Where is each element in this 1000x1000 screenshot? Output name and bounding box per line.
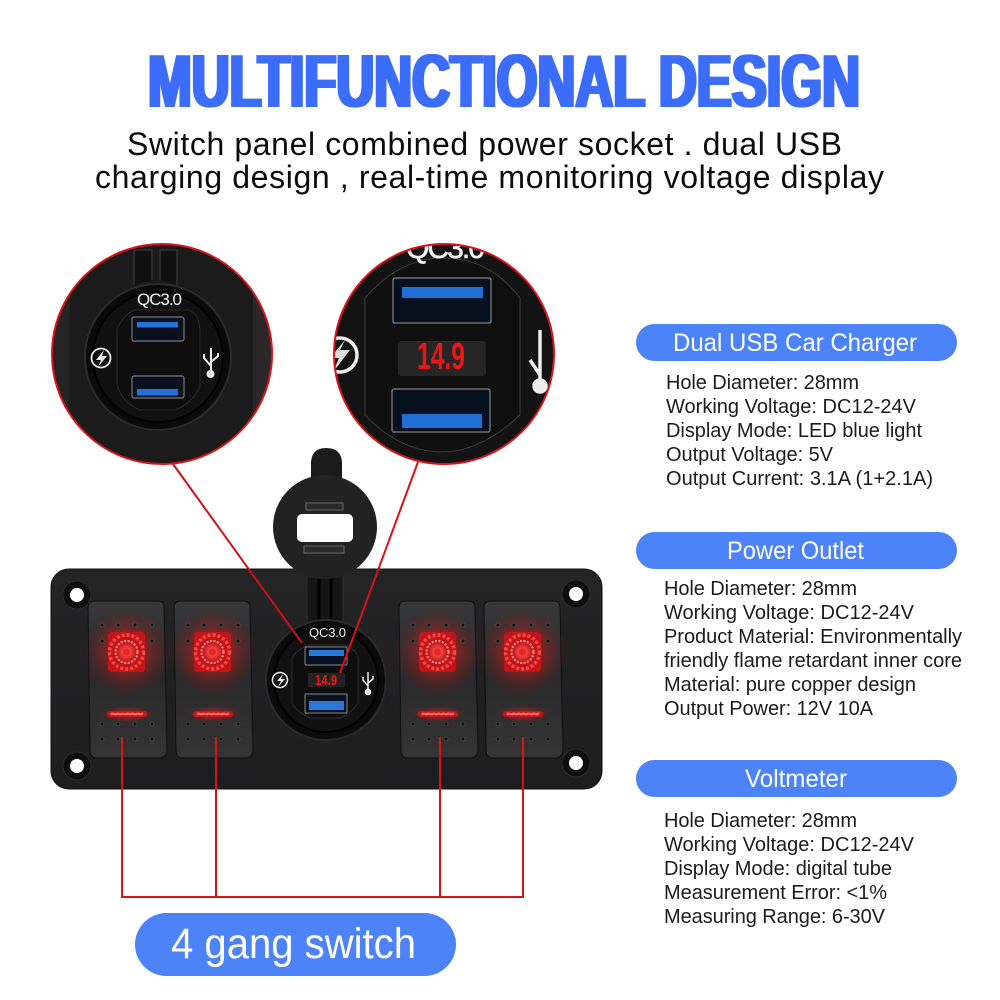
- socket cap: [273, 475, 377, 579]
- specs: Power Outlet: Material: pure copper design: [664, 674, 916, 696]
- specs: Power Outlet: Product Material: Environmentally: [664, 626, 962, 648]
- icon: fast charge bolt: [92, 348, 110, 368]
- right circle voltage display: 14.9: [417, 336, 465, 378]
- specs: Dual USB Car Charger: Display Mode: LED blue light: [666, 420, 922, 442]
- rocker switch 2: [169, 601, 257, 758]
- left circle border: [52, 244, 272, 464]
- specs: Power Outlet: [664, 578, 962, 720]
- heading pill: Voltmeter: Voltmeter: [745, 765, 847, 793]
- mounting plate: [51, 569, 602, 789]
- rocker switch 1: [83, 601, 171, 758]
- panel: left zoom circle showing USB socket: [50, 242, 275, 466]
- socket upper USB port: [305, 647, 347, 665]
- right circle label QC3.0: QC3.0: [406, 232, 485, 265]
- specs: Dual USB Car Charger: Output Voltage: 5V: [666, 444, 834, 466]
- right circle border: [334, 244, 554, 464]
- left circle label QC3.0: QC3.0: [137, 290, 182, 309]
- specs: Dual USB Car Charger: Output Current: 3.1A (1+2.1A): [666, 468, 933, 490]
- icon: bolt: [272, 672, 288, 688]
- rocker switch 3: [394, 601, 482, 758]
- specs: Dual USB Car Charger: Hole Diameter: 28mm: [666, 372, 859, 394]
- central USB socket: [266, 620, 386, 740]
- leader line: left zoom to socket: [173, 464, 302, 643]
- badge: 4 gang switch: [135, 913, 456, 976]
- specs: Voltmeter: [664, 810, 915, 928]
- icon: USB cropped: [530, 330, 546, 392]
- heading pill: Power Outlet: [636, 532, 957, 569]
- heading pill: Voltmeter: [636, 760, 957, 797]
- icon: USB trident: [204, 348, 218, 377]
- badge: 4 gang switch: 4 gang switch: [171, 920, 416, 968]
- icon: fast charge bolt cropped: [335, 336, 359, 374]
- subtitle: charging design , real-time monitoring voltage display: [95, 159, 884, 195]
- heading pill: Power Outlet: Power Outlet: [727, 537, 864, 565]
- specs: Power Outlet: Output Power: 12V 10A: [664, 698, 874, 720]
- specs: Voltmeter: Measurement Error: <1%: [664, 882, 887, 904]
- right circle port: lower USB: [392, 389, 490, 432]
- switch panel product: [51, 448, 602, 789]
- rocker switch 4: [479, 601, 567, 758]
- icon: USB: [363, 672, 373, 694]
- socket label: QC3.0: [309, 625, 346, 640]
- specs: Dual USB Car Charger: [666, 372, 933, 490]
- specs: Voltmeter: Measuring Range: 6-30V: [664, 906, 886, 928]
- heading pill: Dual USB Car Charger: Dual USB Car Charger: [673, 329, 917, 357]
- specs: Power Outlet: Working Voltage: DC12-24V: [664, 602, 915, 624]
- left circle port: upper USB: [132, 317, 184, 341]
- specs: Voltmeter: Hole Diameter: 28mm: [664, 810, 857, 832]
- right circle port: upper USB: [393, 278, 491, 323]
- mounting holes: [63, 580, 590, 780]
- specs: Dual USB Car Charger: Working Voltage: DC12-24V: [666, 396, 917, 418]
- leader line: right zoom to display: [340, 462, 418, 673]
- specs: Voltmeter: Display Mode: digital tube: [664, 858, 892, 880]
- specs: Voltmeter: Working Voltage: DC12-24V: [664, 834, 915, 856]
- heading pill: Dual USB Car Charger: [636, 324, 957, 361]
- subtitle: [95, 126, 884, 195]
- left circle port: lower USB: [132, 376, 184, 398]
- cap tab: [311, 448, 342, 482]
- bracket connecting four switches: [122, 737, 523, 897]
- subtitle: Switch panel combined power socket . dual USB: [127, 126, 842, 162]
- panel: right zoom circle showing voltage display: [323, 232, 556, 466]
- specs: Power Outlet: Hole Diameter: 28mm: [664, 578, 857, 600]
- socket lower USB port: [305, 694, 347, 713]
- specs: Power Outlet: friendly flame retardant inner core: [664, 650, 962, 672]
- socket voltage readout: 14.9: [315, 672, 337, 689]
- socket hinge strap: [307, 576, 343, 626]
